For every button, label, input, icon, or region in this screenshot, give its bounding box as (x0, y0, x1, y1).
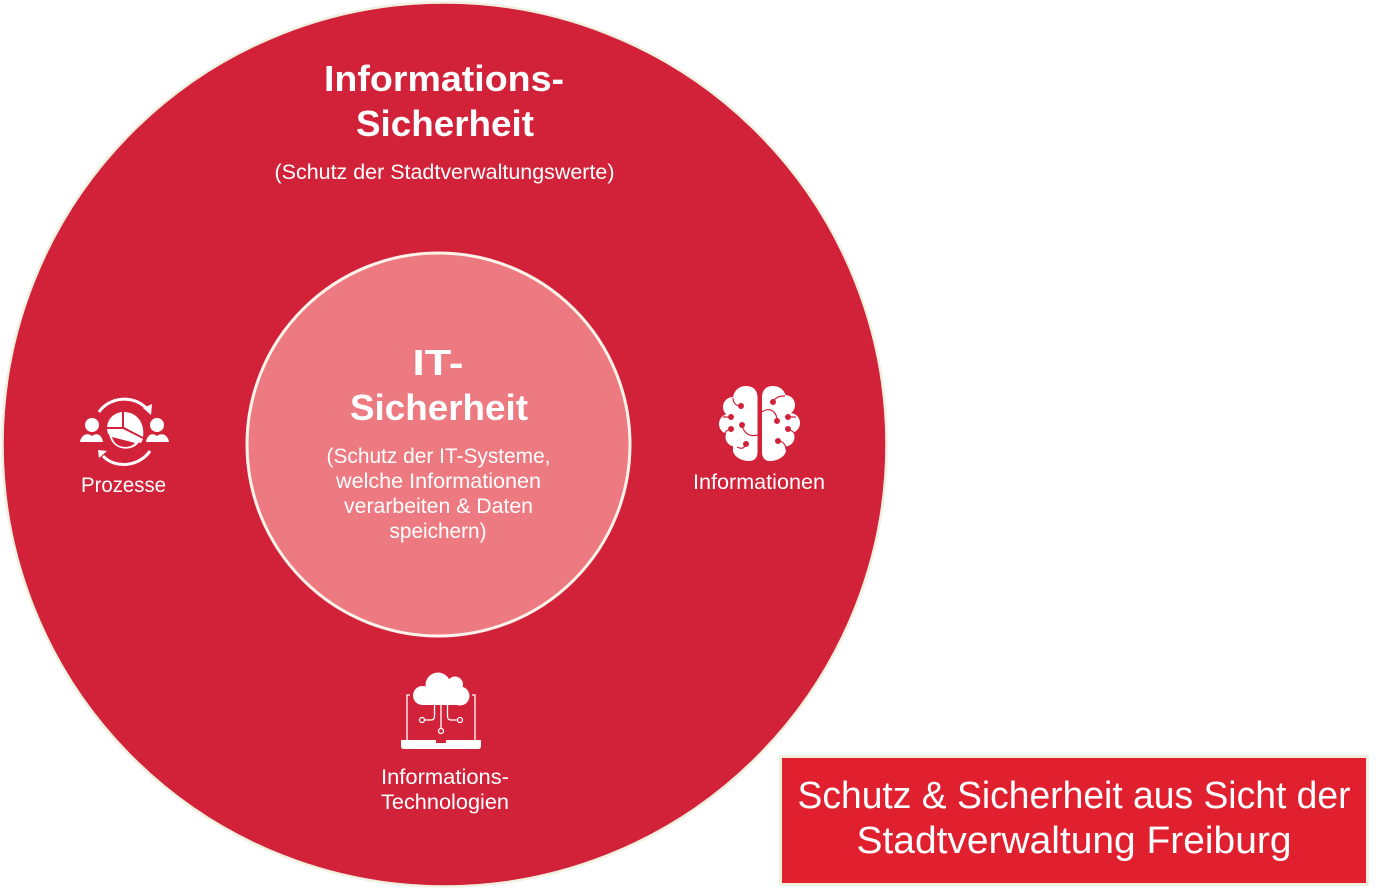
label: Informationen: Informationen (693, 471, 825, 494)
icon: pie chart (107, 412, 143, 449)
icon: left person (80, 418, 103, 442)
title box (780, 756, 1368, 884)
icon: right brain hemisphere (762, 386, 800, 461)
heading: Informations-Sicherheit (324, 58, 564, 144)
text: Schutz der IT-Systeme: verarbeiten & Daten (344, 495, 533, 518)
text: Schutz der IT-Systeme: speichern) (390, 520, 486, 543)
label: Informations-Technologien: Informations- (381, 766, 509, 789)
text: Schutz der IT-Systeme (326, 445, 550, 543)
icon: lower cycle arrow (98, 450, 150, 465)
icon: circuit lines (420, 699, 462, 734)
title text (798, 775, 1351, 862)
panel: outer circle Informationssicherheit (2, 2, 886, 886)
icon: laptop screen (407, 695, 475, 741)
text: Schutz der Stadtverwaltungswerte: (Schutz der Stadtverwaltungswerte) (274, 161, 614, 184)
label: Informations-Technologien (381, 766, 509, 814)
heading: IT-Sicherheit: Sicherheit (350, 387, 528, 428)
icon: cloud (413, 672, 470, 706)
icon: Gehirn (719, 386, 800, 461)
label: Informations-Technologien: Technologien (381, 791, 509, 814)
title text: Stadtverwaltung Freiburg (856, 820, 1292, 862)
icon: laptop base (401, 740, 481, 749)
heading: Informations-Sicherheit: Informations- (324, 58, 564, 99)
icon: upper cycle arrow (99, 399, 152, 415)
icon: brain circuit lines (723, 396, 796, 450)
icon: Cloud-Laptop (401, 672, 481, 749)
icon: left brain hemisphere (719, 386, 758, 461)
heading: IT-Sicherheit (350, 342, 528, 428)
panel: inner circle IT-Sicherheit (247, 253, 630, 636)
heading: Informations-Sicherheit: Sicherheit (356, 103, 534, 144)
text: Schutz der IT-Systeme: welche Informationen (335, 470, 541, 493)
title text: Schutz & Sicherheit aus Sicht der (798, 775, 1351, 817)
icon: right person (146, 418, 169, 442)
label: Prozesse: Prozesse (81, 474, 166, 497)
heading: IT-Sicherheit: IT- (412, 342, 464, 383)
icon: Prozesse (80, 399, 169, 465)
text: Schutz der IT-Systeme: (Schutz der IT-Systeme, (326, 445, 550, 468)
